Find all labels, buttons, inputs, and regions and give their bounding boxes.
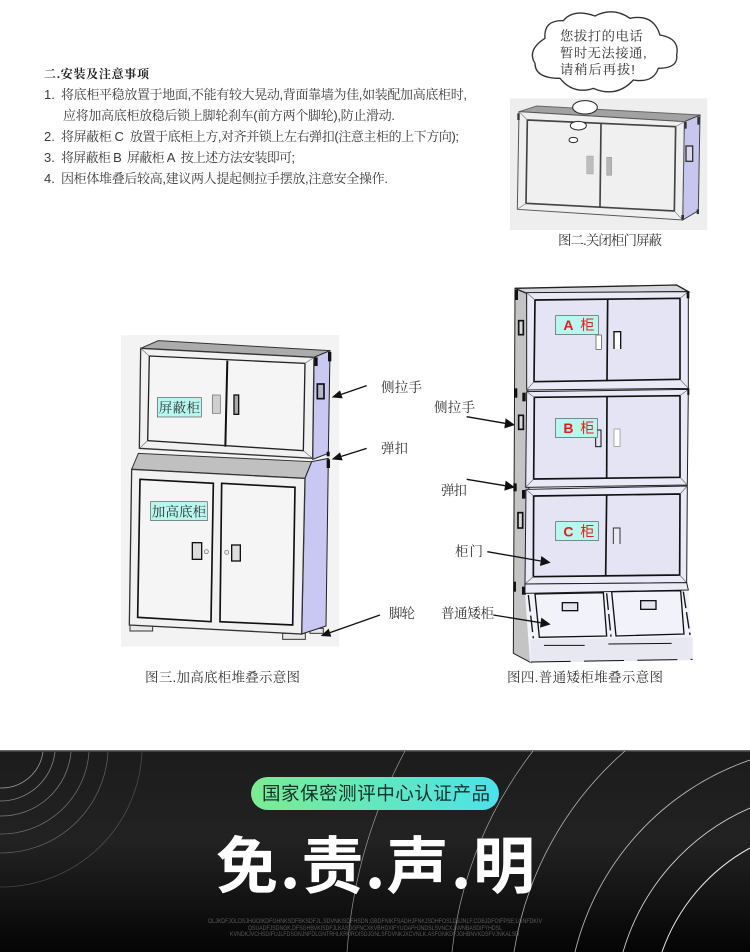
label A cabinet (556, 316, 598, 335)
base cabinet side face (302, 458, 328, 634)
shield cabinet latches (314, 352, 331, 456)
label: side handle: 侧拉手 (381, 379, 422, 395)
speech cloud text: 请稍后再拔! (560, 61, 635, 77)
step 1 (44, 87, 467, 123)
cabinet A doors (534, 298, 680, 382)
label C cabinet: C (563, 523, 573, 539)
label: caster: 脚轮 (389, 606, 416, 621)
door handles (596, 332, 621, 544)
main title: 明 (473, 816, 535, 906)
label B cabinet (556, 418, 597, 438)
arrow: side handle (332, 386, 367, 398)
speech cloud text (560, 28, 647, 77)
base cabinet sloped top (132, 453, 312, 478)
cabinet doors (526, 120, 676, 211)
corner latches (517, 113, 700, 220)
step 4: 因柜体堆叠后较高,建议两人提起侧拉手摆放,注意安全操作. (61, 171, 388, 186)
feet (130, 625, 323, 639)
figure 3: raised base cabinet stack (121, 335, 380, 647)
thought bubbles (569, 101, 597, 143)
low cabinet plinth (531, 637, 693, 663)
base cabinet front (129, 469, 305, 634)
figure 3 caption: 图三.加高底柜堆叠示意图 (145, 669, 300, 685)
step 4: 4. (44, 171, 55, 186)
base cabinet latch (327, 459, 330, 468)
speech cloud (532, 12, 677, 92)
figure 4: low cabinet stack (467, 285, 693, 663)
label: latch: 弹扣 (441, 482, 467, 498)
step 2: 2. (44, 129, 55, 144)
shield cabinet side handle (317, 384, 324, 399)
figure 3 backdrop (121, 335, 339, 647)
small decorative letters: KVNDKJVCHSDIFUJLFDSGNJNFDLGNTRHLKRUROISDJGNLSFDVNKJXCVNLK,ASFGNKDFJGHBNVKDSFVJNKALSD (230, 932, 520, 938)
step 1: 应将加高底柜放稳后锁上脚轮刹车(前方两个脚轮),防止滑动. (63, 108, 395, 123)
low cabinet left drawer (535, 593, 607, 637)
drawer handles (562, 601, 656, 611)
stack side face (513, 288, 531, 663)
shield cabinet door divider (225, 361, 227, 447)
figure 2 backdrop (510, 98, 707, 230)
installation notes text block (44, 66, 467, 186)
label A cabinet: 柜 (580, 317, 594, 333)
small decorative letters (208, 919, 542, 938)
label C cabinet: 柜 (580, 523, 594, 539)
shield cabinet doors (148, 356, 305, 451)
door handle left (587, 156, 593, 174)
heading: 二.安装及注意事项 (44, 66, 150, 81)
figure 2 caption: 图二.关闭柜门屏蔽 (558, 232, 662, 248)
arrow: latch (332, 448, 367, 460)
step 3: 将屏蔽柜 B 屏蔽柜 A 按上述方法安装即可; (61, 150, 295, 165)
low cabinet body (525, 590, 693, 663)
label: latch: 弹扣 (381, 440, 408, 456)
main title: 责 (302, 816, 364, 906)
step 2: 将屏蔽柜 C 放置于底柜上方,对齐并锁上左右弹扣(注意主柜的上下方向); (61, 129, 459, 144)
right concentric arcs (347, 751, 750, 952)
side dashed struts (528, 592, 690, 638)
door divider (597, 124, 603, 207)
label C cabinet (556, 522, 598, 541)
label B cabinet: 柜 (580, 420, 594, 436)
arrow: low cabinet (493, 615, 551, 628)
arrow: latch (467, 479, 515, 491)
cabinet B front (526, 389, 688, 487)
base cabinet label: 加高底柜 (152, 504, 207, 520)
label B cabinet: B (563, 420, 573, 436)
step 1: 将底柜平稳放置于地面,不能有较大晃动,背面靠墙为佳,如装配加高底柜时, (61, 87, 467, 102)
side handles (518, 321, 523, 528)
label: door: 柜门 (455, 543, 483, 559)
label: low cabinet: 普通矮柜 (441, 605, 494, 621)
figure 4 caption: 图四.普通矮柜堆叠示意图 (507, 669, 663, 685)
cabinet C divider (606, 495, 607, 576)
left concentric arcs (0, 752, 142, 887)
main title: . (451, 816, 471, 906)
certification pill: 国家保密测评中心认证产品 (262, 780, 490, 806)
main title: . (365, 816, 385, 906)
cabinet B doors (534, 396, 680, 479)
step 1: 1. (44, 87, 55, 102)
base cabinet handles (192, 543, 240, 561)
shield cabinet top face (141, 341, 330, 357)
shield cabinet front (139, 348, 314, 458)
step 3: 3. (44, 150, 55, 165)
side handle (686, 146, 693, 161)
speech cloud text: 暂时无法接通, (560, 44, 647, 60)
low cabinet right drawer (612, 591, 684, 636)
label A cabinet: A (563, 317, 573, 333)
speech cloud text: 您拔打的电话 (560, 28, 643, 44)
cabinet top face (519, 106, 700, 122)
base cabinet right door (220, 483, 295, 625)
arrow: door (487, 552, 551, 566)
cabinet A divider (604, 300, 610, 380)
cabinet side face (683, 115, 700, 220)
shield cabinet handles (212, 395, 239, 414)
small decorative letters: OLJKDFJGLDSJHGOIKDFGHNKSDFBKSDFJL,SDVNKISDFHSDN,GBDFNIKFSADHJFNKJSDHFOSLDBJNLF.CDBJDFOIFPSE;LGNFDKIV (208, 919, 542, 925)
banner top edge (0, 750, 750, 752)
shield cabinet label: 屏蔽柜 (159, 400, 200, 416)
disclaimer banner (0, 750, 750, 952)
cabinet A front (527, 292, 688, 390)
frame bevels (517, 112, 684, 220)
stack top face (515, 285, 688, 293)
main title: 声 (386, 816, 449, 906)
shield cabinet bevels (139, 348, 314, 458)
main title: . (280, 816, 300, 906)
label: side handle: 侧拉手 (434, 399, 476, 415)
shield cabinet side face (313, 351, 330, 459)
cabinet C front (525, 486, 687, 584)
cabinet C doors (533, 494, 680, 577)
frame bevels (525, 292, 688, 584)
low cabinet shelf (525, 583, 688, 593)
door handle right (607, 157, 612, 175)
arrow: caster (321, 615, 380, 637)
main title: 免 (216, 816, 278, 906)
figure 2: closed cabinet with speech cloud (510, 12, 707, 230)
latches (513, 290, 689, 595)
base cabinet left door (138, 479, 213, 622)
small decorative letters: OSUADFJSDNGK,DFSGHBVKISDFJLKASDGFNCXKVBHDXIFYUOAFHJNDSLSVNCXJNVNBASDIFYHDSL (248, 926, 503, 932)
banner background (0, 751, 750, 952)
cabinet B divider (604, 397, 609, 478)
arrow: side handle (467, 417, 515, 428)
cabinet front frame (517, 112, 684, 220)
